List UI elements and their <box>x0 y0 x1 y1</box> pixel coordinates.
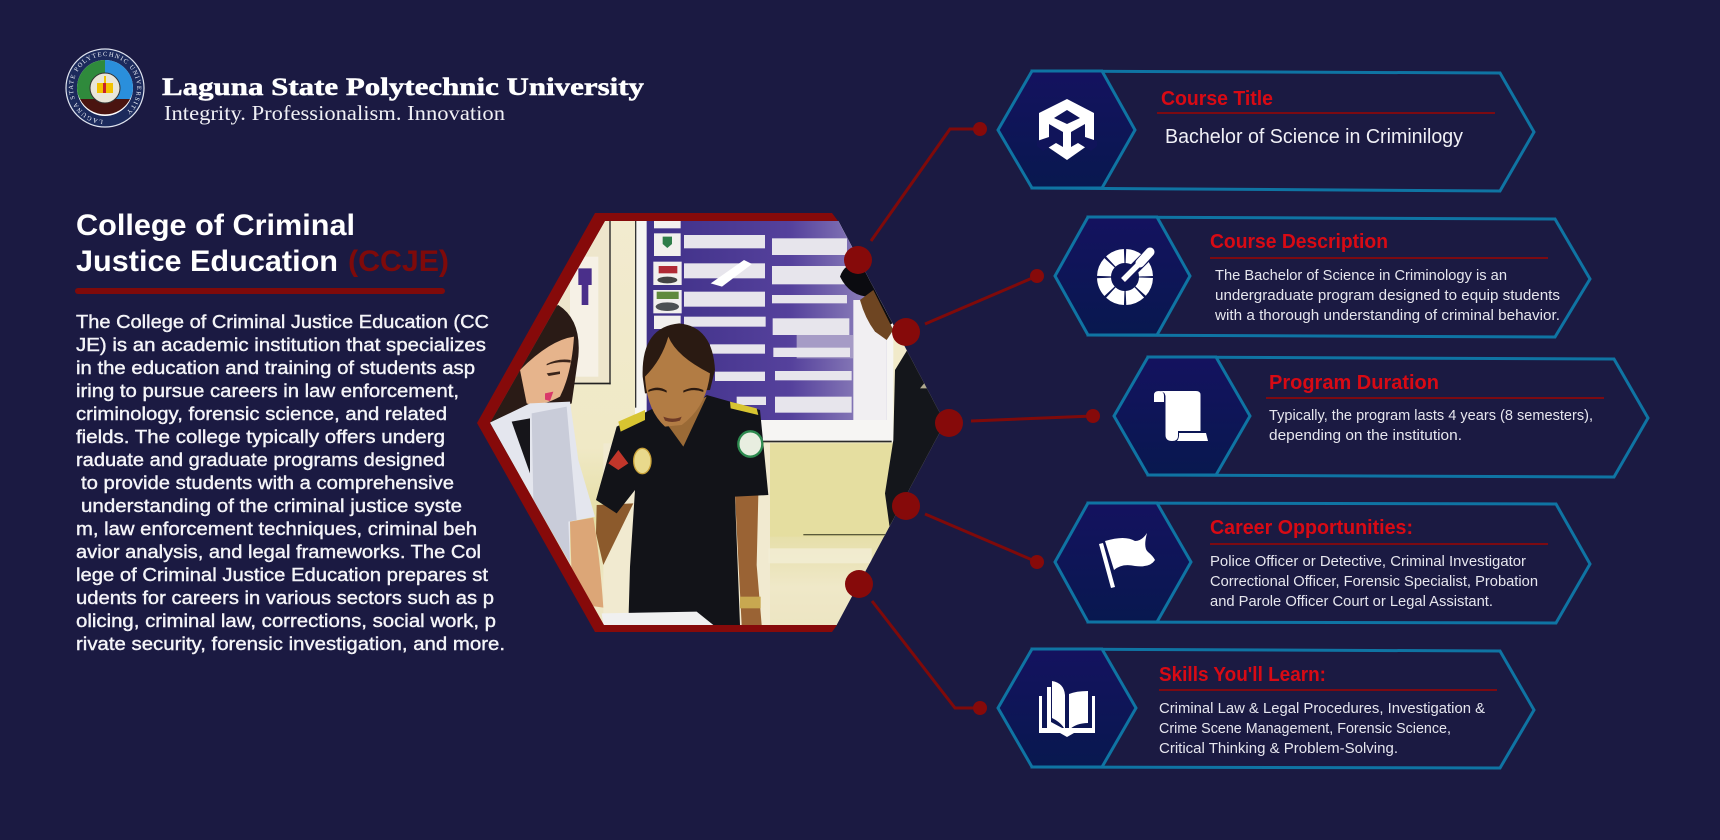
body text block: The College of Criminal Justice Education (CC <box>76 311 489 332</box>
panel: skills <box>998 649 1534 768</box>
panel: skills: Crime Scene Management, Forensic Science, <box>1159 721 1451 737</box>
head <box>643 323 715 393</box>
icon: flag <box>1099 533 1155 588</box>
panel: program duration: Typically, the program lasts 4 years (8 semesters), <box>1269 408 1593 424</box>
body text block: to provide students with a comprehensive <box>81 472 454 493</box>
icon: cube logo <box>1037 99 1097 160</box>
panel: course title: Bachelor of Science in Criminilogy <box>1165 126 1463 148</box>
panel: skills: Skills You'll Learn: <box>1159 664 1326 686</box>
center woman uniform <box>596 395 768 625</box>
body text block: JE) is an academic institution that specializes <box>76 334 486 355</box>
man at right <box>885 350 940 526</box>
panel: course title: Course Title <box>1161 88 1273 110</box>
heading: Justice Education <box>76 245 338 278</box>
panel: skills: Criminal Law & Legal Procedures, Investigation & <box>1159 701 1485 717</box>
body text block: fields. The college typically offers underg <box>76 426 445 447</box>
body text block: raduate and graduate programs designed <box>76 449 445 470</box>
panel: career opportunities: Career Opportunities: <box>1210 517 1413 539</box>
body text block: m, law enforcement techniques, criminal beh <box>76 518 477 539</box>
body text block: iring to pursue careers in law enforcement, <box>76 380 459 401</box>
body text block: criminology, forensic science, and related <box>76 403 447 424</box>
hexagon red frame <box>477 213 838 632</box>
panel: program duration <box>1114 357 1648 477</box>
panel: career opportunities: Police Officer or Detective, Criminal Investigator <box>1210 554 1526 570</box>
body text block <box>76 311 505 654</box>
heading: College of Criminal <box>76 209 355 242</box>
panel: skills: Critical Thinking & Problem-Solving. <box>1159 741 1398 757</box>
body text block: in the education and training of students asp <box>76 357 475 378</box>
body text block: avior analysis, and legal frameworks. The Col <box>76 541 481 562</box>
panel: course description: The Bachelor of Science in Criminology is an <box>1215 268 1507 284</box>
icon: open book <box>1039 681 1095 737</box>
wall lower <box>768 548 872 563</box>
hexagon photo <box>490 221 940 625</box>
icon: university seal: LAGUNA STATE POLYTECHNIC UNIVERSITY <box>68 52 142 124</box>
paper <box>602 612 713 625</box>
body text block: rivate security, forensic investigation, and more. <box>76 633 505 654</box>
small connector dots <box>973 122 1100 715</box>
heading <box>76 209 449 278</box>
icon: colour wheel and dropper <box>1103 252 1150 299</box>
heading: (CCJE) <box>348 245 449 278</box>
panel: career opportunities: Correctional Officer, Forensic Specialist, Probation <box>1210 574 1538 590</box>
tagline: Integrity. Professionalism. Innovation <box>164 101 505 125</box>
large connector dots <box>844 246 963 598</box>
panel: career opportunities: and Parole Officer Court or Legal Assistant. <box>1210 594 1493 610</box>
panel: course description <box>1055 217 1590 337</box>
body text block: lege of Criminal Justice Education prepares st <box>76 564 488 585</box>
body text block: olicing, criminal law, corrections, social work, p <box>76 610 496 631</box>
panel: program duration: Program Duration <box>1269 372 1439 394</box>
panel: career opportunities <box>1055 503 1590 623</box>
notice board <box>635 221 893 442</box>
left woman <box>490 305 579 423</box>
neck <box>668 396 707 446</box>
body text block: udents for careers in various sectors such as p <box>76 587 494 608</box>
body text block: understanding of the criminal justice syste <box>81 495 462 516</box>
logo title: university name: Laguna State Polytechnic University <box>162 74 645 101</box>
panel: program duration: depending on the institution. <box>1269 428 1462 444</box>
heading underline <box>75 288 445 294</box>
panel: course description: Course Description <box>1210 231 1388 253</box>
connector lines <box>871 129 1093 708</box>
left poster <box>560 221 605 300</box>
center woman arms <box>596 503 633 565</box>
panel: course title <box>998 71 1534 191</box>
panel: course description: undergraduate program designed to equip students <box>1215 288 1560 304</box>
panel: course description: with a thorough understanding of criminal behavior. <box>1214 308 1560 324</box>
icon: scroll <box>1154 391 1208 441</box>
